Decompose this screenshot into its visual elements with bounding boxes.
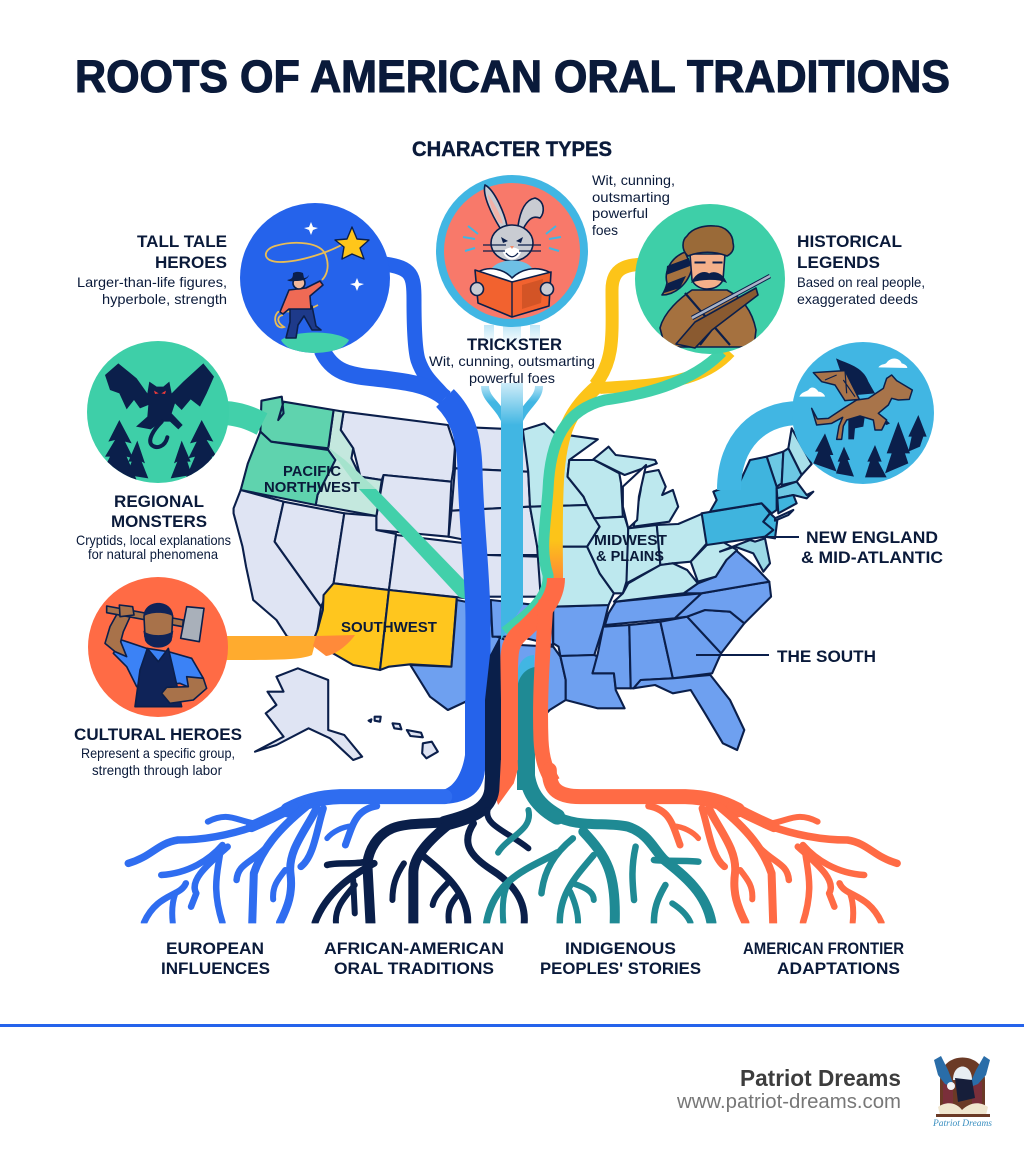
icon circle: tall tale hero cowboy [240, 203, 390, 354]
root label: European influences [161, 939, 270, 978]
label: regional monsters: REGIONAL [114, 492, 204, 511]
hammer [107, 606, 183, 627]
label: tall tale heroes: Larger-than-life figures, [77, 274, 227, 290]
star [335, 227, 369, 259]
icon circle: cultural hero with hammer [88, 577, 228, 717]
fur hat [683, 226, 734, 256]
dragon body [812, 375, 912, 439]
map label: Midwest and Plains: MIDWEST [594, 532, 667, 549]
root label: American frontier adaptations: ADAPTATIONS [777, 959, 900, 978]
lake Michigan [623, 465, 646, 528]
trees [103, 420, 137, 480]
lasso [266, 243, 345, 327]
root label: European influences: EUROPEAN [166, 939, 264, 958]
root label: African-American oral traditions [324, 939, 504, 978]
ribbon: trickster centre stem [484, 325, 540, 640]
label: regional monsters: MONSTERS [111, 512, 207, 531]
region: The South [410, 548, 771, 750]
heading: character types: CHARACTER TYPES [412, 138, 612, 161]
roots: Indigenous peoples' stories [487, 760, 711, 923]
region: interior west states [234, 412, 541, 642]
trunk: orange right strand [541, 600, 553, 782]
footer website: www.patriot-dreams.com [676, 1091, 901, 1113]
label: tall tale heroes: HEROES [155, 253, 227, 272]
footer brand name: Patriot Dreams [740, 1065, 901, 1091]
arms [105, 613, 132, 657]
label: historical legends: LEGENDS [797, 253, 880, 272]
roots: European influences [128, 797, 445, 923]
label: historical legends: HISTORICAL [797, 232, 902, 251]
scarf [492, 260, 532, 280]
icon circle: dragon [792, 342, 934, 484]
region: Midwest and Plains [523, 423, 737, 607]
label: cultural heroes: CULTURAL HEROES [74, 725, 242, 744]
root label: Indigenous peoples' stories: INDIGENOUS [565, 939, 676, 958]
label: side note wit and cunning [592, 172, 675, 238]
ribbon: regional monsters to Pacific Northwest [225, 413, 468, 600]
callout: New England and Mid-Atlantic [763, 528, 943, 567]
label: regional monsters: for natural phenomena [88, 546, 218, 562]
rabbit head [491, 225, 533, 261]
label: side note wit and cunning: powerful [592, 205, 648, 221]
region: Southwest [313, 583, 457, 670]
map label: Pacific Northwest: PACIFIC [283, 463, 341, 480]
trunk: orange strands [509, 578, 556, 770]
hill [281, 332, 349, 354]
root label: Indigenous peoples' stories [540, 939, 701, 978]
map label: Midwest and Plains [594, 532, 667, 565]
label: cultural heroes: Represent a specific group, [81, 745, 235, 761]
label: cultural heroes [74, 725, 242, 778]
callout: The South: THE SOUTH [777, 647, 876, 666]
label: tall tale heroes [77, 232, 227, 307]
label: regional monsters [76, 492, 231, 562]
label: side note wit and cunning: foes [592, 222, 618, 238]
hand [119, 605, 134, 617]
root label: African-American oral traditions: AFRICAN-AMERICAN [324, 939, 504, 958]
root label: American frontier adaptations [743, 939, 904, 978]
eyes and moustache [692, 262, 726, 282]
coat [660, 290, 756, 347]
sparkles [304, 222, 364, 291]
root label: Indigenous peoples' stories: PEOPLES' STORIES [540, 959, 701, 978]
label: trickster: TRICKSTER [467, 335, 562, 354]
bat creature [105, 363, 214, 447]
roots: orange sheath [496, 760, 518, 805]
label: side note wit and cunning: outsmarting [592, 189, 670, 205]
ribbon: cultural heroes to Southwest [222, 635, 355, 660]
callout: New England and Mid-Atlantic: NEW ENGLAND [806, 528, 938, 547]
clouds [799, 387, 825, 397]
callout: New England and Mid-Atlantic: & MID-ATLANTIC [801, 548, 943, 567]
icon circle: regional monster [87, 341, 229, 483]
ribbon: historical legends green [505, 352, 722, 632]
label: side note wit and cunning: Wit, cunning, [592, 172, 675, 188]
label: cultural heroes: strength through labor [92, 762, 222, 778]
ribbon: new england connector [729, 413, 800, 490]
map label: Pacific Northwest [264, 463, 360, 496]
motion lines [463, 226, 561, 251]
label: tall tale heroes: TALL TALE [137, 232, 227, 251]
region: Alaska and Hawaii [255, 668, 438, 760]
roots [128, 760, 897, 923]
root label: American frontier adaptations: AMERICAN FRONTIER [743, 939, 904, 958]
map label: Southwest: SOUTHWEST [341, 619, 437, 636]
ribbon: tall tale heroes blue [322, 264, 491, 804]
hands [470, 282, 484, 296]
trunk: teal strand [517, 667, 535, 790]
trunk: navy strand [485, 636, 501, 775]
label: trickster [429, 335, 595, 386]
face [690, 254, 725, 289]
label: historical legends: exaggerated deeds [797, 291, 918, 307]
rabbit ears [484, 185, 507, 228]
label: tall tale heroes: hyperbole, strength [102, 291, 227, 307]
trees [813, 415, 927, 477]
region: New England and Mid-Atlantic [702, 428, 813, 572]
near wing [813, 371, 859, 401]
trunk [485, 578, 556, 790]
label: historical legends [797, 232, 925, 307]
shirt and apron [113, 640, 203, 688]
icon circle: historical legend frontiersman [635, 204, 785, 354]
label: trickster: Wit, cunning, outsmarting [429, 353, 595, 369]
region: Pacific Northwest [241, 397, 382, 516]
footer rule [0, 1024, 1024, 1027]
root label: European influences: INFLUENCES [161, 959, 270, 978]
cowboy figure [280, 272, 323, 338]
map label: Pacific Northwest: NORTHWEST [264, 479, 360, 496]
root label: African-American oral traditions: ORAL TRADITIONS [334, 959, 494, 978]
label: historical legends: Based on real people, [797, 274, 925, 290]
icon: Patriot Dreams logo: Patriot Dreams [932, 1118, 993, 1128]
far wing and leg [836, 358, 875, 395]
title: ROOTS OF AMERICAN ORAL TRADITIONS [75, 51, 950, 102]
book [478, 269, 549, 282]
map of the United States [234, 397, 771, 750]
roots: American frontier adaptations [549, 770, 897, 923]
head and beard [144, 609, 173, 645]
trunk: cyan cap [518, 655, 534, 690]
label: trickster: powerful foes [469, 370, 555, 386]
roots: African-American oral traditions [315, 760, 528, 923]
icon: Patriot Dreams logo [932, 1056, 993, 1128]
icon circle: trickster rabbit with book [436, 175, 588, 327]
map label: Midwest and Plains: & PLAINS [596, 548, 664, 565]
rifle [676, 288, 758, 348]
ribbon: historical legends yellow [556, 264, 730, 580]
raccoon tail [662, 252, 692, 295]
label: regional monsters: Cryptids, local explanations [76, 532, 231, 548]
